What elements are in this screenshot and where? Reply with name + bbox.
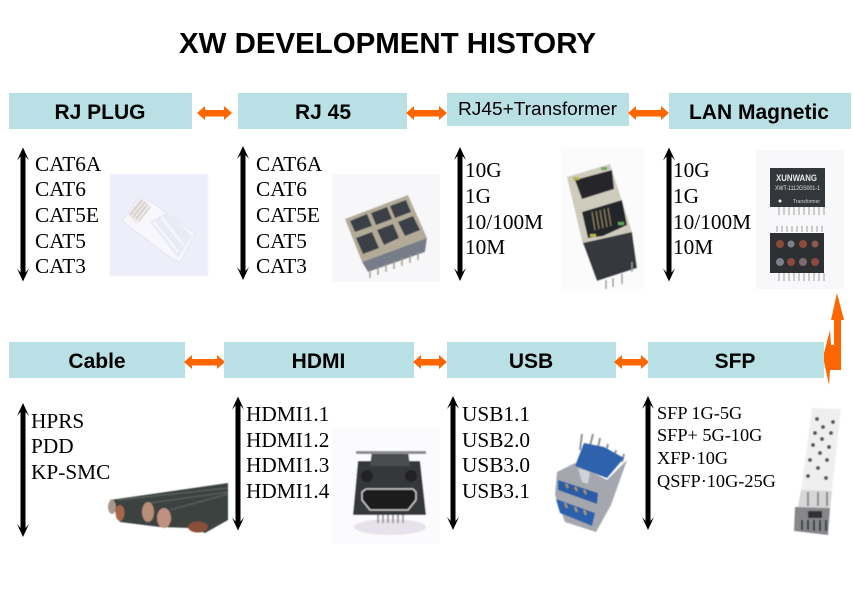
photo: SFP cage xyxy=(794,408,841,535)
photo: stacked RJ45 with transformer xyxy=(561,148,644,289)
connector arrow xyxy=(406,106,447,120)
version list: HDMI1.1 xyxy=(246,402,329,426)
range arrow xyxy=(237,146,249,280)
heading: HDMI: HDMI xyxy=(292,350,345,373)
heading: RJ45+Transformer xyxy=(447,93,629,126)
category list: CAT5E xyxy=(35,203,99,227)
panel: RJ 45 xyxy=(237,93,440,282)
connector arrow xyxy=(628,106,669,120)
heading: USB xyxy=(447,342,616,378)
photo: RJ plug xyxy=(110,174,208,276)
photo: LAN transformer chips: XUNWANG xyxy=(776,173,817,183)
category list xyxy=(256,152,323,278)
photo: stacked USB connector xyxy=(555,434,627,532)
category list: CAT6 xyxy=(35,177,86,201)
title: XW DEVELOPMENT HISTORY xyxy=(179,28,596,60)
version list: HDMI1.4 xyxy=(246,479,330,503)
panel: Cable xyxy=(9,342,228,537)
panel: SFP xyxy=(642,342,841,535)
heading: RJ PLUG: RJ PLUG xyxy=(54,101,146,124)
range arrow xyxy=(447,396,459,530)
panel: HDMI xyxy=(224,342,440,544)
version list xyxy=(246,402,330,503)
panel: RJ PLUG xyxy=(9,93,208,282)
cable type list xyxy=(31,409,110,484)
speed list xyxy=(657,403,776,491)
heading: Cable xyxy=(9,342,185,378)
category list: CAT6A xyxy=(35,152,102,176)
category list: CAT5E xyxy=(256,203,320,227)
version list: USB3.1 xyxy=(462,479,530,503)
speed list: XFP·10G xyxy=(657,448,728,468)
heading: RJ 45: RJ 45 xyxy=(295,101,351,124)
connector arrow xyxy=(184,355,225,369)
connector arrow xyxy=(197,106,232,120)
category list: CAT3 xyxy=(35,254,86,278)
category list: CAT5 xyxy=(256,229,307,253)
connector arrow xyxy=(614,355,649,369)
range arrow xyxy=(17,403,29,537)
panel: RJ45+Transformer xyxy=(447,93,644,289)
connector arrow xyxy=(413,355,447,369)
heading: SFP: SFP xyxy=(715,350,755,373)
arrow: up from SFP to LAN Magnetic xyxy=(823,293,844,385)
speed list: 10M xyxy=(673,235,713,259)
speed list: SFP+ 5G-10G xyxy=(657,425,762,445)
photo: LAN transformer chips: Transformer xyxy=(793,199,820,205)
version list xyxy=(462,402,530,503)
speed list: 10G xyxy=(465,158,502,182)
speed list: SFP 1G-5G xyxy=(657,403,742,423)
category list: CAT6A xyxy=(256,152,323,176)
category list: CAT3 xyxy=(256,254,307,278)
cable type list: HPRS xyxy=(31,409,84,433)
speed list: 1G xyxy=(673,184,699,208)
range arrow xyxy=(17,148,29,282)
heading: Cable: Cable xyxy=(68,350,126,373)
speed list: 10/100M xyxy=(673,210,751,234)
heading: LAN Magnetic: LAN Magnetic xyxy=(689,101,829,124)
category list: CAT6 xyxy=(256,177,307,201)
panel: LAN Magnetic xyxy=(663,93,851,289)
heading: SFP xyxy=(648,342,824,378)
speed list: 10G xyxy=(673,158,710,182)
category list xyxy=(35,152,102,278)
version list: USB2.0 xyxy=(462,428,530,452)
photo: RJ45 multi-port connector xyxy=(332,174,440,282)
heading: RJ45+Transformer: RJ45+Transformer xyxy=(458,99,617,119)
range arrow xyxy=(642,396,654,530)
version list: USB3.0 xyxy=(462,453,530,477)
range arrow xyxy=(454,147,466,281)
version list: HDMI1.2 xyxy=(246,428,329,452)
photo: cables xyxy=(108,483,228,533)
speed list: 1G xyxy=(465,184,491,208)
heading: USB: USB xyxy=(509,350,553,373)
cable type list: KP-SMC xyxy=(31,460,110,484)
range arrow xyxy=(232,396,244,530)
speed list: QSFP·10G-25G xyxy=(657,471,776,491)
speed list: 10M xyxy=(465,235,505,259)
heading: RJ 45 xyxy=(238,93,407,129)
photo: LAN transformer chips: XWT-1112GS001-1 xyxy=(775,185,820,192)
cable type list: PDD xyxy=(31,434,74,458)
heading: HDMI xyxy=(224,342,414,378)
version list: USB1.1 xyxy=(462,402,530,426)
speed list xyxy=(673,158,751,259)
heading: RJ PLUG xyxy=(9,93,192,129)
panel: USB xyxy=(447,342,627,532)
speed list: 10/100M xyxy=(465,210,543,234)
version list: HDMI1.3 xyxy=(246,453,329,477)
speed list xyxy=(465,158,543,259)
heading: LAN Magnetic xyxy=(669,93,851,129)
range arrow xyxy=(663,148,675,282)
photo: LAN transformer chips xyxy=(756,150,844,289)
photo: HDMI connector xyxy=(332,428,440,544)
category list: CAT5 xyxy=(35,229,86,253)
